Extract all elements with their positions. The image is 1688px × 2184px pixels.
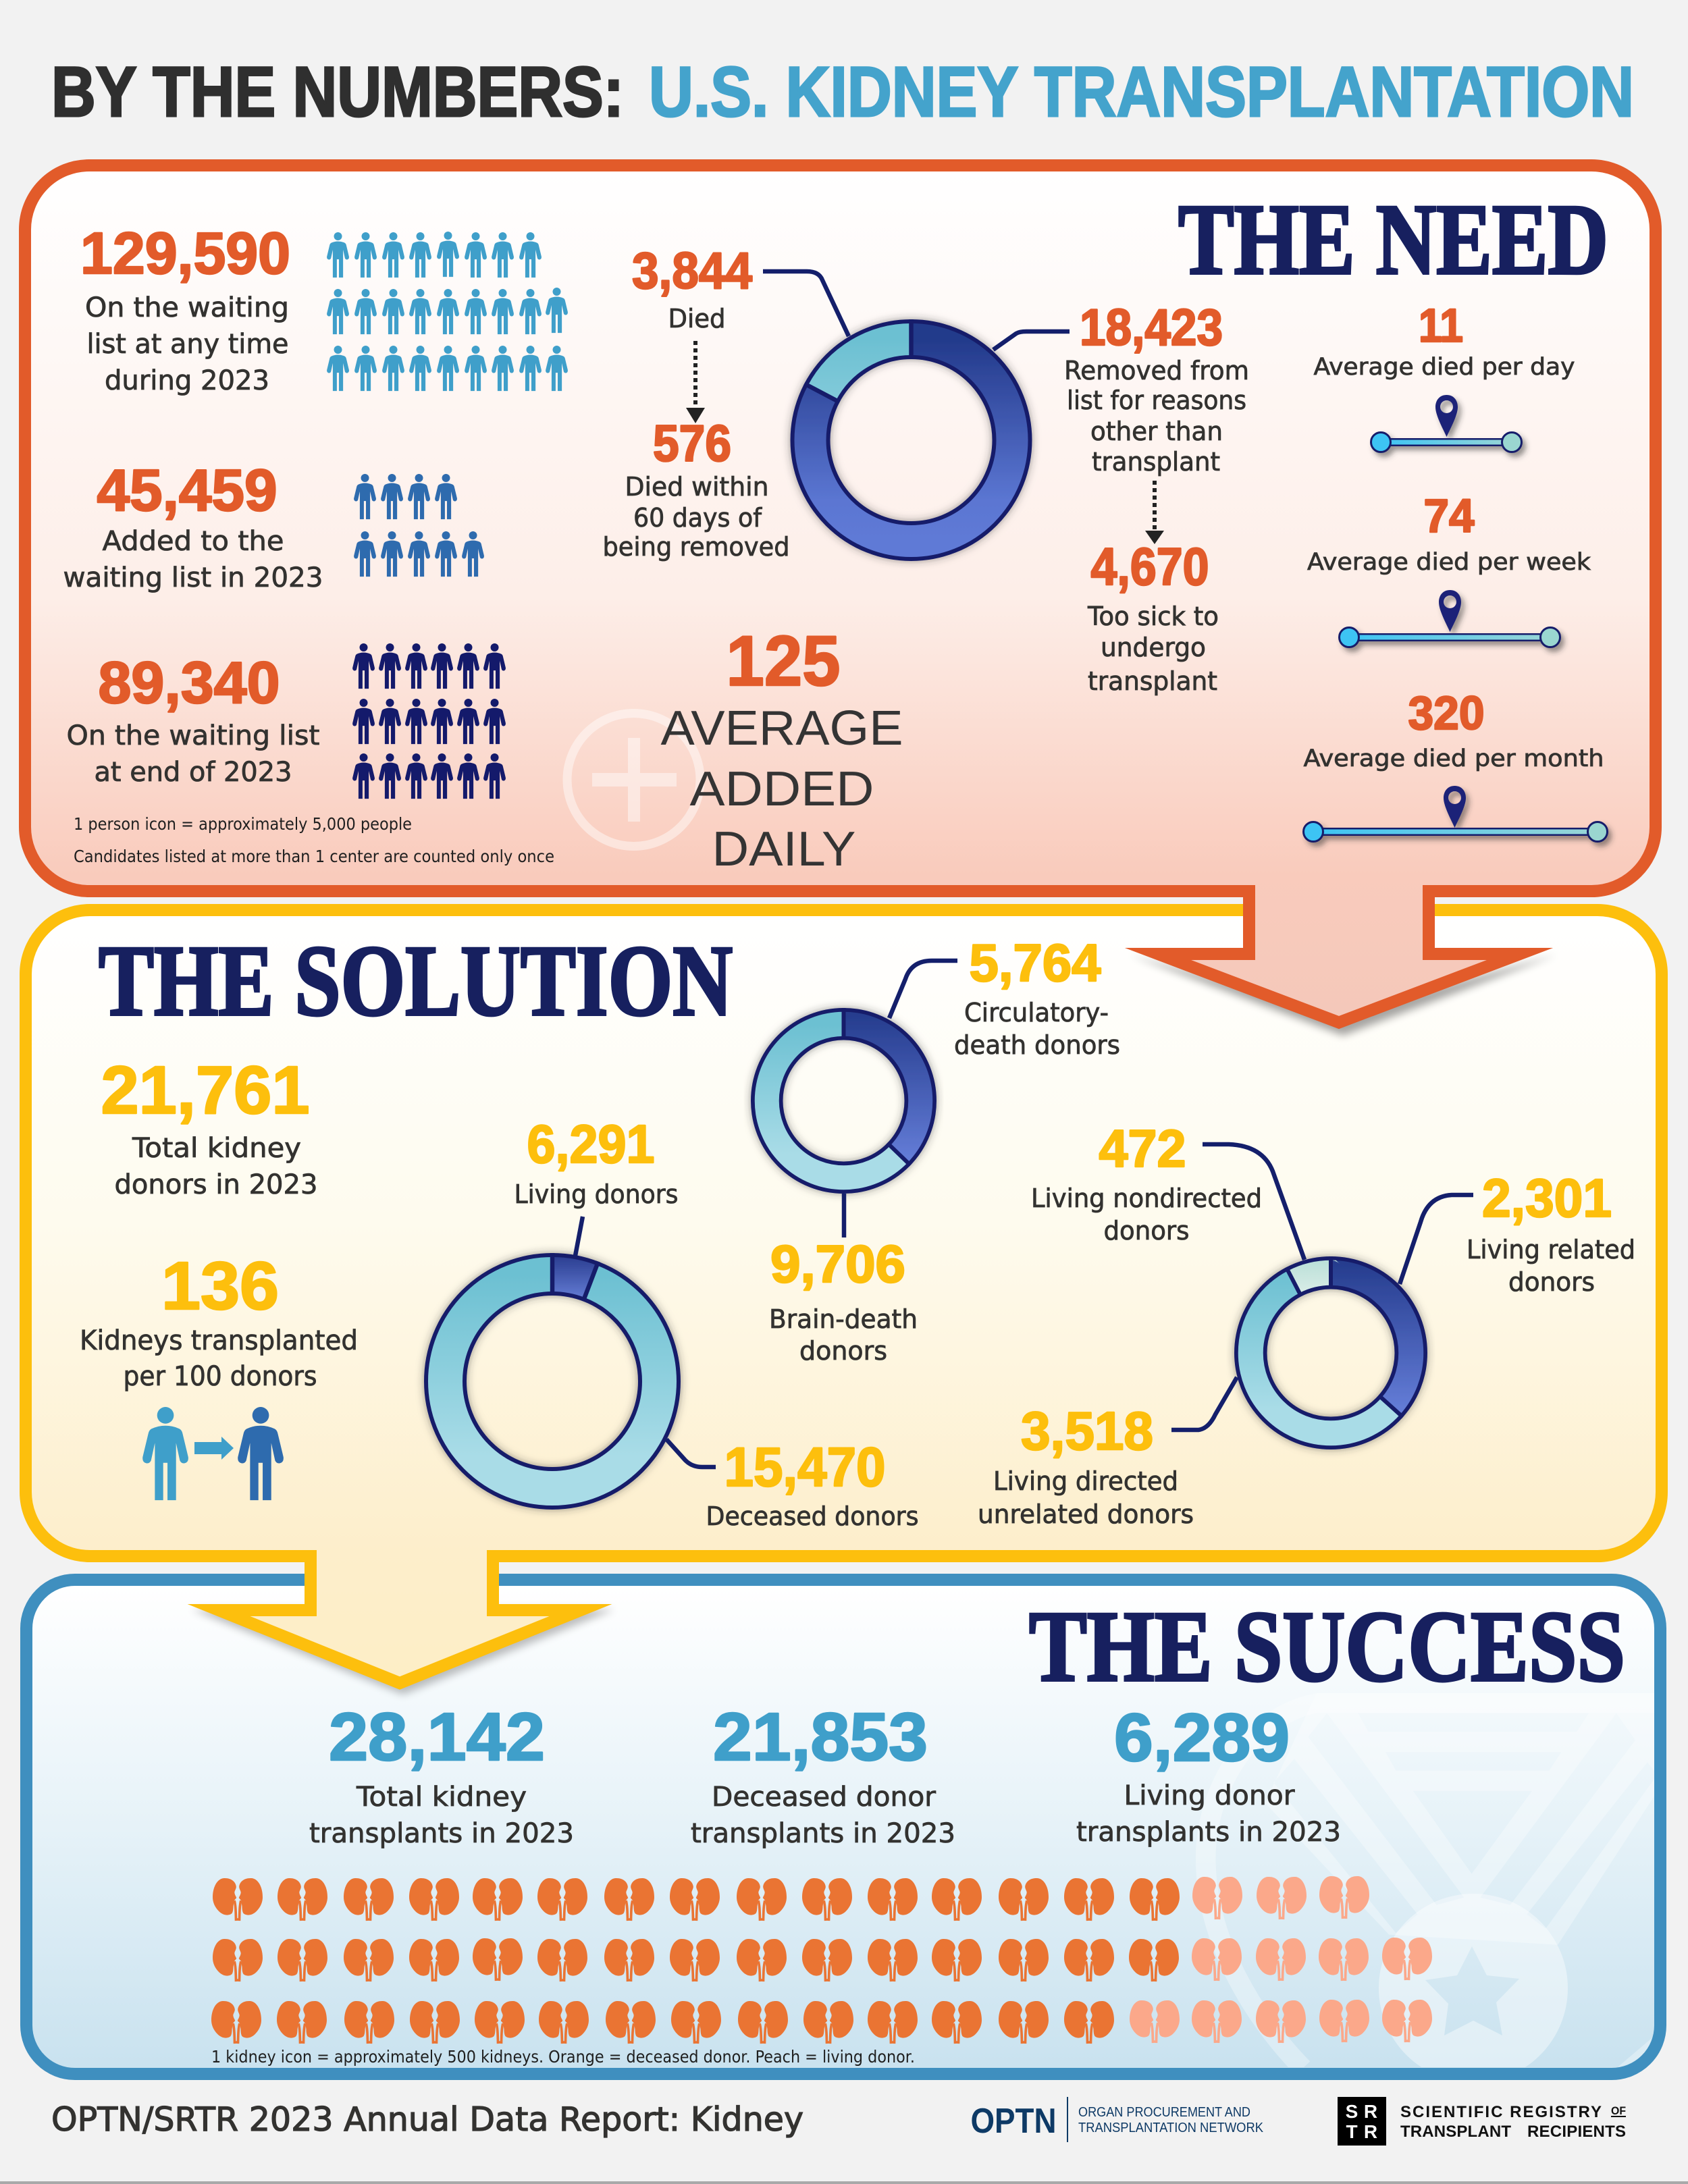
leader: living donors [575, 1217, 583, 1256]
slider: per day [1371, 395, 1522, 452]
stat: on the waiting list during 2023: 129,590 [80, 221, 290, 286]
label: removed from list: list for reasons [1067, 385, 1246, 415]
stat: on the waiting list at end of 2023: at end of 2023 [95, 757, 292, 788]
label: removed from list: transplant [1092, 447, 1220, 477]
stat: deceased donor transplants: Deceased donor [712, 1782, 937, 1813]
callout: average added daily: AVERAGE [660, 701, 903, 755]
callout: average added daily: 125 [727, 622, 840, 701]
label: removed from list: 18,423 [1080, 299, 1223, 356]
stat: average died per month: 320 [1408, 687, 1484, 739]
stat: average died per week [1307, 489, 1591, 576]
stat: kidneys per 100 donors: 136 [161, 1248, 279, 1324]
stat: deceased donor transplants [691, 1699, 955, 1849]
label: deceased donors: Deceased donors [706, 1501, 918, 1531]
label: living nondirected donors: 472 [1099, 1119, 1186, 1178]
heading: the need: THE NEED [1178, 184, 1608, 296]
stat: total kidney transplants: 28,142 [329, 1699, 545, 1775]
panel: the need [25, 165, 1656, 1036]
label: brain-death donors: 9,706 [770, 1234, 905, 1294]
stat: kidneys per 100 donors: per 100 donors [123, 1361, 317, 1392]
footnotes: Candidates listed at more than 1 center are counted only once [74, 847, 554, 866]
label: living directed unrelated donors [978, 1401, 1194, 1529]
callout: average added daily: DAILY [712, 822, 856, 876]
logo: SRTR: OF [1611, 2104, 1626, 2117]
label: died within 60 days [602, 415, 790, 562]
slider: per week [1340, 590, 1560, 647]
stat: on the waiting list at end of 2023: On the waiting list [66, 720, 319, 751]
leader: living nondirected donors [1203, 1144, 1304, 1260]
label: living donors: Living donors [515, 1179, 678, 1209]
stat: living donor transplants: transplants in 2023 [1076, 1817, 1341, 1848]
stat: living donor transplants: Living donor [1124, 1780, 1295, 1811]
stat: deceased donor transplants: transplants in 2023 [691, 1818, 955, 1849]
logo: OPTN: OPTN [971, 2102, 1056, 2141]
label: deceased donors: 15,470 [724, 1437, 886, 1498]
leader: living related donors [1400, 1195, 1473, 1284]
stat: kidneys per 100 donors [80, 1248, 358, 1392]
label: circulatory-death donors: Circulatory- [964, 998, 1109, 1028]
label: circulatory-death donors [954, 933, 1120, 1060]
label: living directed unrelated donors: 3,518 [1021, 1401, 1153, 1461]
label: died: 3,844 [632, 242, 752, 300]
callout: average added daily: ADDED [690, 762, 874, 816]
label: too sick to undergo transplant [1087, 537, 1219, 696]
logo: SRTR: TRANSPLANT [1400, 2123, 1511, 2141]
donut: living donor types [1250, 1256, 1411, 1433]
donut: removal reasons [804, 319, 1012, 541]
logo: SRTR: R [1364, 2101, 1377, 2122]
label: too sick to undergo transplant: 4,670 [1091, 537, 1209, 596]
icons: people on the list [327, 232, 568, 391]
label: living nondirected donors: Living nondirected [1031, 1183, 1262, 1213]
footnotes [74, 814, 554, 866]
label: too sick to undergo transplant: transplant [1088, 666, 1217, 696]
stat: living donor transplants: 6,289 [1114, 1700, 1290, 1776]
stat: kidneys per 100 donors: Kidneys transplanted [80, 1325, 358, 1356]
stat: average died per month: Average died per month [1303, 745, 1604, 772]
dotted arrow: removed to too sick [1145, 481, 1164, 544]
stat: on the waiting list during 2023: list at any time [86, 329, 289, 360]
stat: total kidney transplants: transplants in 2023 [309, 1818, 574, 1849]
label: living nondirected donors: donors [1103, 1216, 1190, 1246]
logo: SRTR: R [1364, 2121, 1377, 2142]
label: died within 60 days: 60 days of [633, 503, 763, 533]
label: too sick to undergo transplant: Too sick to [1087, 602, 1219, 631]
heading: the solution: THE SOLUTION [99, 925, 733, 1037]
label: died within 60 days: being removed [602, 532, 790, 562]
stat: total kidney donors: donors in 2023 [115, 1169, 318, 1200]
label: removed from list: Removed from [1064, 356, 1249, 385]
stat: living donor transplants [1076, 1700, 1341, 1848]
logo: OPTN: TRANSPLANTATION NETWORK [1078, 2121, 1264, 2135]
logo: OPTN: ORGAN PROCUREMENT AND [1078, 2105, 1250, 2120]
stat: total kidney donors: Total kidney [132, 1133, 301, 1164]
stat: on the waiting list during 2023: On the waiting [85, 292, 289, 323]
label: living donors: 6,291 [527, 1114, 655, 1174]
label: removed from list: other than [1090, 417, 1223, 446]
slider: per month [1303, 786, 1607, 841]
leader: died [763, 271, 849, 336]
label: living directed unrelated donors: Living directed [993, 1466, 1178, 1496]
label: living donors [515, 1114, 678, 1209]
title [51, 53, 1634, 132]
panel: the solution [26, 910, 1662, 1695]
label: brain-death donors: Brain-death [769, 1304, 918, 1334]
stat: average died per week: 74 [1423, 489, 1475, 542]
stat: average died per day: Average died per day [1314, 354, 1575, 381]
icons: people at end of year [352, 643, 506, 799]
stat: average died per day: 11 [1419, 299, 1463, 352]
logo: SRTR: RECIPIENTS [1527, 2123, 1626, 2141]
icon: donor to recipient [142, 1407, 284, 1500]
stat: added to the waiting list: Added to the [103, 526, 284, 557]
leader: circulatory-death donors [889, 961, 957, 1018]
stat: on the waiting list during 2023 [80, 221, 290, 396]
panel: the success [26, 1580, 1660, 2083]
label: died within 60 days: 576 [653, 415, 731, 473]
label: deceased donors [706, 1437, 918, 1531]
stat: on the waiting list at end of 2023: 89,340 [99, 650, 280, 716]
leader: brain-death donors [842, 1194, 846, 1237]
label: brain-death donors [769, 1234, 918, 1366]
footer: report name: OPTN/SRTR 2023 Annual Data Report: Kidney [51, 2100, 803, 2139]
leader: removed [993, 331, 1070, 350]
leader: deceased donors [666, 1439, 716, 1467]
kidney icon grid [211, 1876, 1432, 2044]
stat: total kidney donors [101, 1053, 318, 1200]
label: too sick to undergo transplant: undergo [1101, 633, 1206, 662]
label: brain-death donors: donors [799, 1336, 887, 1366]
stat: average died per week: Average died per week [1307, 549, 1591, 576]
stat: deceased donor transplants: 21,853 [713, 1699, 928, 1775]
callout: average added daily [660, 622, 903, 876]
stat: on the waiting list during 2023: during 2023 [105, 365, 269, 396]
label: living related donors [1467, 1168, 1635, 1297]
title: BY THE NUMBERS: [51, 53, 624, 132]
label: died within 60 days: Died within [625, 472, 768, 502]
stat: on the waiting list at end of 2023 [66, 650, 319, 788]
label: died: Died [668, 304, 725, 334]
stat: average died per month [1303, 687, 1604, 772]
stat: added to the waiting list: waiting list in 2023 [63, 562, 323, 593]
label: removed from list [1064, 299, 1249, 477]
label: living nondirected donors [1031, 1119, 1262, 1246]
stat: average died per day [1314, 299, 1575, 381]
stat: total kidney transplants [309, 1699, 574, 1849]
label: living related donors: 2,301 [1482, 1168, 1612, 1228]
logo: SRTR: T [1346, 2121, 1358, 2142]
icons: people added [354, 474, 484, 577]
leader: living directed unrelated donors [1171, 1377, 1237, 1430]
logo: SRTR: S [1346, 2101, 1358, 2122]
label: living related donors: donors [1508, 1267, 1595, 1297]
stat: added to the waiting list [63, 458, 323, 593]
label: living directed unrelated donors: unrelated donors [978, 1499, 1194, 1529]
logo: SRTR [1338, 2097, 1626, 2146]
dotted arrow: died to died within 60 days [686, 341, 705, 423]
medal watermark [1196, 1844, 1653, 2067]
donut: circulatory vs brain death [767, 1008, 920, 1177]
logo: SRTR: SCIENTIFIC REGISTRY [1400, 2103, 1602, 2121]
label: circulatory-death donors: death donors [954, 1030, 1120, 1060]
donut: living vs deceased donors [446, 1253, 659, 1488]
label: died [632, 242, 752, 334]
logo: OPTN [971, 2097, 1264, 2142]
stat: total kidney donors: 21,761 [101, 1053, 309, 1128]
stat: total kidney transplants: Total kidney [356, 1782, 527, 1813]
stat: added to the waiting list: 45,459 [97, 458, 277, 523]
kidney icon legend: 1 kidney icon = approximately 500 kidneys. Orange = deceased donor. Peach = living donor. [211, 2047, 915, 2067]
label: circulatory-death donors: 5,764 [970, 933, 1101, 992]
label: living related donors: Living related [1467, 1235, 1635, 1264]
bottom page edge [0, 2181, 1688, 2184]
footnotes: 1 person icon = approximately 5,000 people [74, 814, 412, 834]
icon: plus watermark [563, 709, 705, 851]
